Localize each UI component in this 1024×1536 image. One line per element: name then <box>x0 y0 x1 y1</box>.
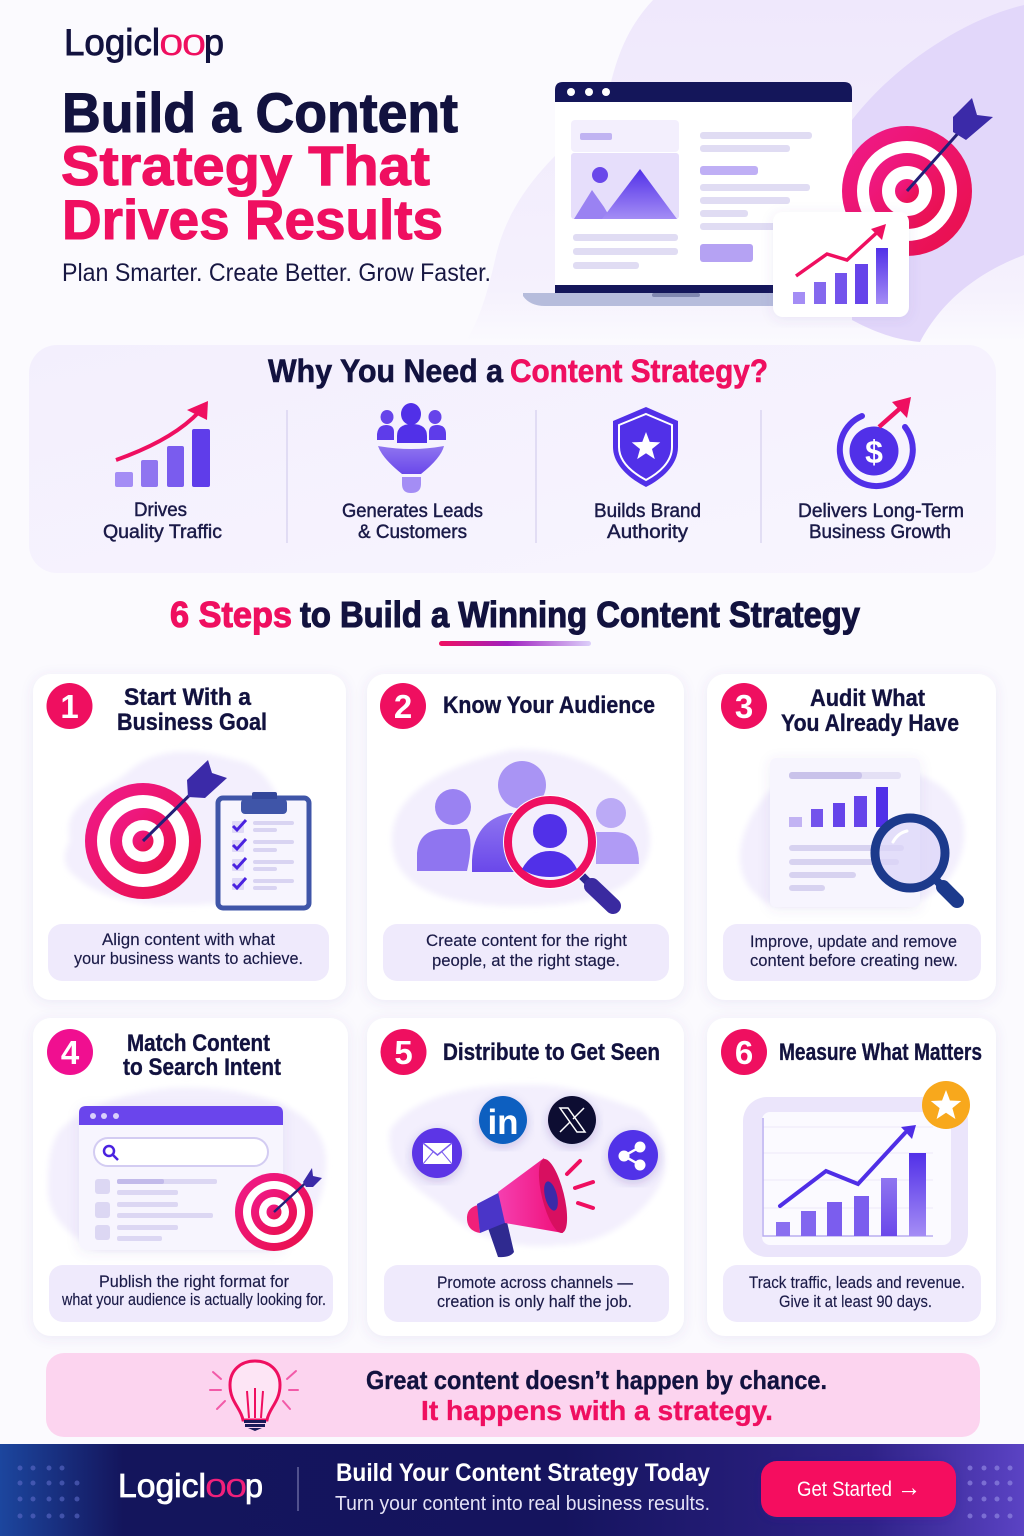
footer headline: Build Your Content Strategy Today <box>336 1459 710 1487</box>
heading 2: Know Your Audience <box>443 692 655 719</box>
heading 1: Start With a <box>124 684 252 711</box>
heading 3: Audit What <box>810 685 925 712</box>
logo: Logicl <box>64 22 160 63</box>
card 2: know your audience <box>367 674 684 1000</box>
description 5: creation is only half the job. <box>437 1293 632 1311</box>
heading 1: Business Goal <box>117 709 267 736</box>
label: generates leads and customers: & Customers <box>358 522 467 543</box>
icon: shield with star <box>613 407 678 487</box>
badge 5: 5 <box>394 1034 413 1071</box>
icon: light bulb <box>210 1361 298 1431</box>
heading 3: You Already Have <box>781 710 959 737</box>
title: Build a Content <box>62 81 458 144</box>
hero illustration: target with arrow <box>842 98 993 256</box>
logo <box>64 21 224 63</box>
badge 4 <box>47 1029 93 1075</box>
description 4: what your audience is actually looking for. <box>61 1291 326 1309</box>
illustration: audience with magnifier <box>417 761 639 906</box>
label: drives quality traffic: Drives <box>134 500 187 521</box>
logo: oo <box>159 21 205 63</box>
card 6: measure what matters <box>707 1018 996 1336</box>
description 4: Publish the right format for <box>99 1273 289 1291</box>
description 3 <box>723 924 981 981</box>
label: builds brand authority <box>594 501 701 543</box>
title: Strategy That <box>61 134 430 197</box>
callout text: Great content doesn’t happen by chance. <box>366 1365 827 1395</box>
description 3: content before creating new. <box>750 952 958 970</box>
button: get started <box>761 1461 956 1517</box>
logo: p <box>204 22 224 63</box>
icon: dollar growth <box>840 397 913 486</box>
heading: six steps <box>170 594 860 646</box>
label: drives quality traffic <box>103 500 222 543</box>
icon: x <box>548 1096 596 1144</box>
description 3: Improve, update and remove <box>750 933 957 951</box>
hero illustration: growth chart card <box>773 212 909 317</box>
description 1: Align content with what <box>102 931 275 949</box>
button: get started: Get Started → <box>797 1472 921 1502</box>
description 1 <box>48 924 329 981</box>
label: drives quality traffic: Quality Traffic <box>103 522 222 543</box>
icon: linkedin <box>479 1096 527 1144</box>
badge 4: 4 <box>61 1034 80 1071</box>
badge 6 <box>721 1029 767 1075</box>
footer logo: p <box>245 1467 263 1504</box>
heading 1 <box>117 684 267 736</box>
footer logo <box>118 1467 263 1504</box>
footer subline: Turn your content into real business results. <box>335 1493 710 1515</box>
illustration: small target <box>235 1168 322 1251</box>
label: generates leads and customers <box>342 501 483 543</box>
callout text: It happens with a strategy. <box>421 1395 773 1426</box>
card 1: start with a business goal <box>33 674 346 1000</box>
description 4 <box>49 1265 333 1322</box>
label: delivers long-term business growth <box>798 501 964 543</box>
description 2: Create content for the right <box>426 932 627 950</box>
badge 1: 1 <box>60 688 79 725</box>
label: delivers long-term business growth: Delivers Long-Term <box>798 501 964 522</box>
description 5: Promote across channels — <box>437 1274 633 1292</box>
badge 6: 6 <box>735 1034 753 1071</box>
illustration: blue magnifier <box>875 818 957 901</box>
description 6: Give it at least 90 days. <box>779 1293 932 1311</box>
footer logo: oo <box>205 1467 246 1504</box>
description 1: your business wants to achieve. <box>74 950 303 968</box>
heading 4: to Search Intent <box>123 1054 281 1081</box>
heading: six steps: 6 Steps <box>170 594 292 635</box>
card 3: audit what you already have <box>707 674 996 1000</box>
heading 5: Distribute to Get Seen <box>443 1039 660 1066</box>
description 6: Track traffic, leads and revenue. <box>749 1274 965 1292</box>
badge 3 <box>721 683 767 729</box>
badge 1 <box>46 683 92 729</box>
illustration: audit document <box>770 758 920 907</box>
dot pattern right <box>968 1466 1012 1518</box>
header background shapes <box>465 0 1024 342</box>
heading: why: Content Strategy? <box>510 353 768 389</box>
heading: why <box>268 353 768 389</box>
label: generates leads and customers: Generates Leads <box>342 501 483 522</box>
panel: why you need a content strategy <box>29 345 996 573</box>
badge 5 <box>380 1029 426 1075</box>
heading 4 <box>123 1030 281 1081</box>
icon: dollar growth: $ <box>865 434 883 470</box>
title <box>61 81 458 251</box>
heading: why: Why You Need a <box>268 353 503 389</box>
title: Drives Results <box>62 188 443 251</box>
label: delivers long-term business growth: Business Growth <box>809 522 951 543</box>
description 6 <box>723 1265 981 1322</box>
description 2 <box>383 924 669 981</box>
icon: star badge <box>922 1081 970 1129</box>
illustration: search window <box>79 1106 283 1250</box>
card 5: distribute to get seen <box>367 1018 684 1336</box>
heading 3 <box>781 685 959 737</box>
icon: traffic chart <box>115 401 210 487</box>
dot pattern left <box>18 1466 80 1518</box>
badge 2: 2 <box>394 688 412 725</box>
icon: share <box>608 1130 658 1180</box>
illustration: growth dashboard <box>743 1097 968 1257</box>
illustration: megaphone <box>467 1156 593 1257</box>
label: builds brand authority: Builds Brand <box>594 501 701 522</box>
description 5 <box>384 1265 669 1322</box>
callout banner <box>46 1353 980 1437</box>
callout text <box>366 1365 827 1426</box>
illustration: checklist clipboard <box>218 792 309 908</box>
icon: mail <box>412 1128 462 1178</box>
hero illustration: laptop <box>523 82 852 306</box>
label: builds brand authority: Authority <box>607 522 689 543</box>
footer band <box>0 1444 1024 1536</box>
heading: six steps: to Build a Winning Content Strategy <box>300 594 860 635</box>
badge 2 <box>380 683 426 729</box>
description 2: people, at the right stage. <box>432 952 620 970</box>
subtitle: Plan Smarter. Create Better. Grow Faster. <box>62 259 491 287</box>
icon: linkedin: in <box>487 1103 519 1142</box>
heading 4: Match Content <box>127 1030 270 1057</box>
card 4: match content to search intent <box>33 1018 348 1336</box>
footer logo: Logicl <box>118 1467 206 1504</box>
icon: lead funnel <box>377 403 446 493</box>
illustration: target <box>85 760 227 899</box>
badge 3: 3 <box>735 688 753 725</box>
